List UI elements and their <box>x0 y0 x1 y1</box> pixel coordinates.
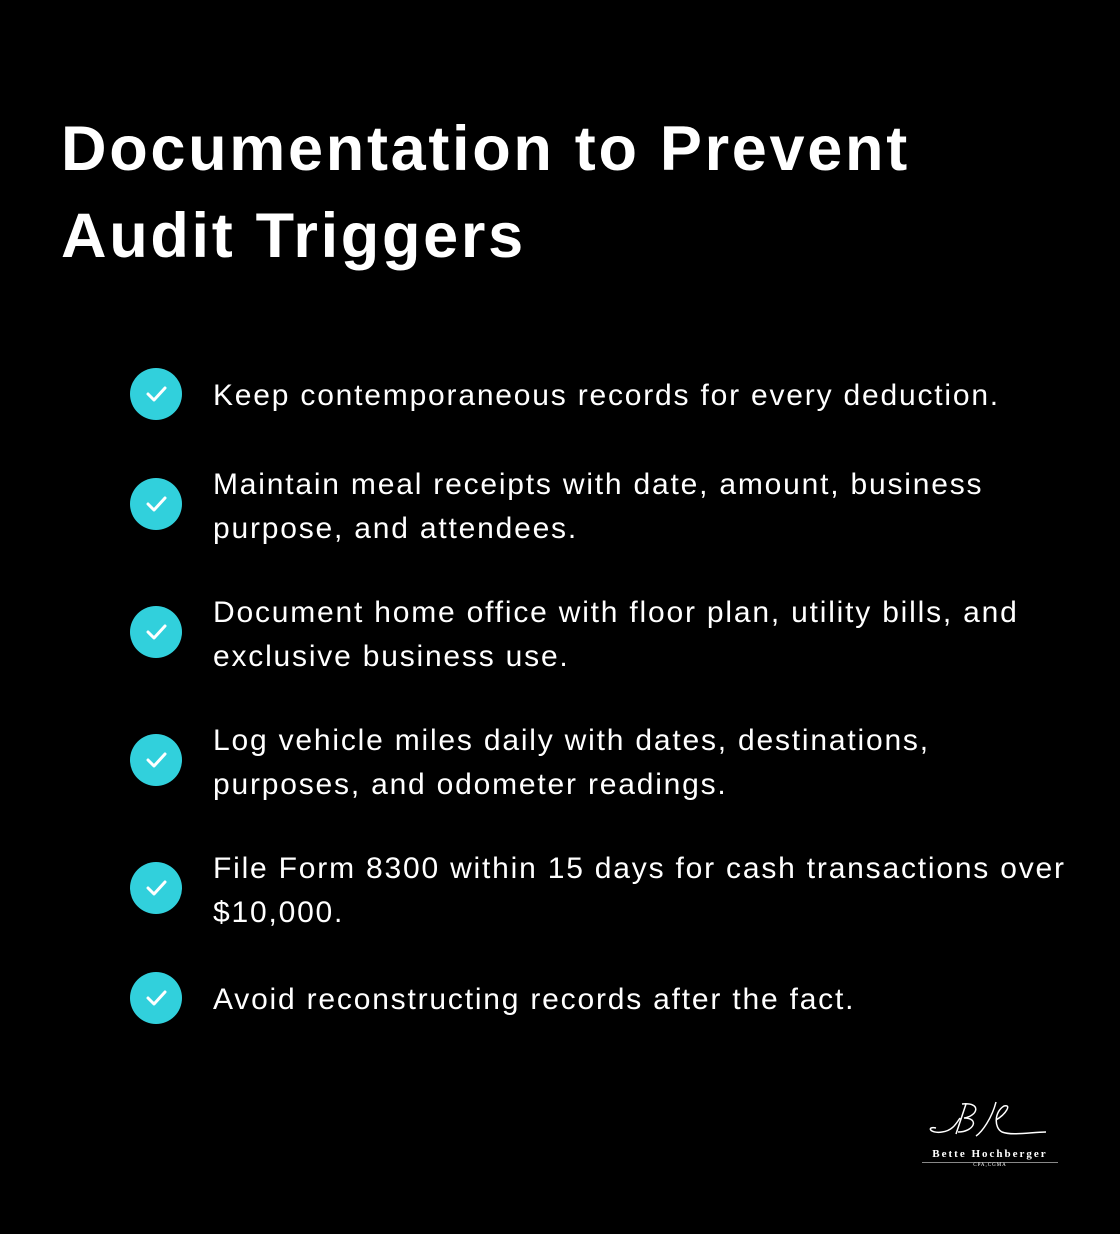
icon: check <box>130 478 182 530</box>
text: Document home office with floor plan, utility bills, and <box>213 596 1019 629</box>
logo: CPA,CGMA <box>973 1163 1007 1168</box>
item 1 <box>130 368 1000 420</box>
title <box>61 114 910 271</box>
text: Keep contemporaneous records for every deduction. <box>213 379 1000 412</box>
text: File Form 8300 within 15 days for cash transactions over <box>213 852 1066 885</box>
text: Maintain meal receipts with date, amount, business <box>213 468 983 501</box>
item 6 <box>130 972 855 1024</box>
icon: check <box>130 734 182 786</box>
logo <box>922 1102 1058 1168</box>
text <box>213 852 1066 929</box>
title: Documentation to Prevent <box>61 114 910 184</box>
icon: check <box>130 368 182 420</box>
text: purpose, and attendees. <box>213 512 578 545</box>
title: Audit Triggers <box>61 201 526 271</box>
icon: check <box>130 606 182 658</box>
logo name: Bette Hochberger <box>932 1148 1048 1160</box>
text: Log vehicle miles daily with dates, destinations, <box>213 724 930 757</box>
item 5 <box>130 852 1066 929</box>
text: $10,000. <box>213 896 344 929</box>
item 3 <box>130 596 1019 673</box>
icon: check <box>130 862 182 914</box>
item 2 <box>130 468 983 545</box>
text: exclusive business use. <box>213 640 570 673</box>
text <box>213 724 930 801</box>
item 4 <box>130 724 930 801</box>
text <box>213 596 1019 673</box>
icon: check <box>130 972 182 1024</box>
text: purposes, and odometer readings. <box>213 768 728 801</box>
logo signature <box>930 1102 1046 1137</box>
text: Avoid reconstructing records after the fact. <box>213 983 855 1016</box>
text <box>213 468 983 545</box>
